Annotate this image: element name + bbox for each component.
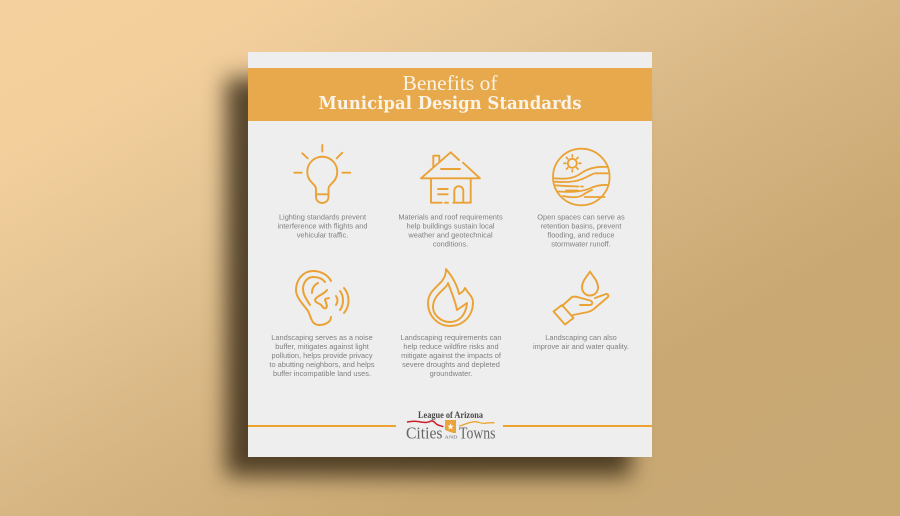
text: materials: Materials and roof requirements bbox=[398, 212, 503, 222]
text: materials: weather and geotechnical bbox=[407, 230, 493, 240]
footer rule left bbox=[248, 425, 396, 427]
icon: hand with water drop bbox=[554, 272, 608, 324]
text: open spaces: flooding, and reduce bbox=[548, 230, 614, 240]
header band bbox=[248, 68, 652, 121]
text: open spaces: stormwater runoff. bbox=[551, 240, 611, 248]
text: wildfire: severe droughts and depleted bbox=[402, 360, 500, 369]
text: wildfire: Landscaping requirements can bbox=[400, 333, 502, 342]
text: noise buffer: to abutting neighbors, and helps bbox=[269, 360, 375, 369]
text: lighting: vehicular traffic. bbox=[297, 230, 348, 240]
icon: house bbox=[421, 152, 480, 203]
logo: Arizona state star: ★ bbox=[447, 422, 455, 432]
text: lighting: Lighting standards prevent bbox=[279, 212, 366, 222]
text: air and water: improve air and water quality. bbox=[533, 342, 629, 351]
text: lighting: interference with flights and bbox=[278, 222, 367, 230]
icon: ear with sound waves bbox=[296, 271, 348, 325]
logo: wordmark bbox=[406, 424, 496, 442]
text: wildfire: mitigate against the impacts of bbox=[401, 351, 502, 360]
text: open spaces: retention basins, prevent bbox=[541, 222, 621, 230]
text: noise buffer: buffer, mitigates against light bbox=[275, 342, 369, 351]
icon: landscape in circle bbox=[553, 149, 610, 205]
text: wildfire: help reduce wildfire risks and bbox=[403, 342, 499, 351]
logo: wordmark: Cities bbox=[406, 424, 442, 442]
text: wildfire: groundwater. bbox=[430, 369, 472, 378]
footer rule right bbox=[503, 425, 652, 427]
title bbox=[318, 71, 582, 114]
text: air and water: Landscaping can also bbox=[545, 333, 617, 342]
logo: League of Arizona Cities and Towns bbox=[406, 411, 496, 442]
text: materials: help buildings sustain local bbox=[407, 222, 495, 230]
logo: orange ribbon bbox=[459, 422, 494, 426]
title: Municipal Design Standards bbox=[318, 93, 582, 114]
text: noise buffer: Landscaping serves as a noise bbox=[271, 333, 373, 342]
panel: card background bbox=[248, 52, 652, 457]
text: noise buffer: buffer incompatible land uses. bbox=[273, 369, 371, 378]
logo: wordmark: AND bbox=[444, 434, 458, 440]
icon: light bulb bbox=[294, 145, 350, 203]
title: Benefits of bbox=[402, 71, 498, 95]
text: noise buffer: pollution, helps provide privacy bbox=[271, 351, 373, 360]
logo: League of Arizona Cities and Towns: League of Arizona bbox=[418, 411, 483, 421]
descriptions bbox=[269, 212, 629, 378]
card shadow bbox=[226, 78, 631, 476]
icon: flame bbox=[428, 269, 473, 326]
text: open spaces: Open spaces can serve as bbox=[537, 212, 625, 222]
logo: wordmark: Towns bbox=[459, 424, 496, 442]
text: materials: conditions. bbox=[433, 240, 468, 248]
logo: red ribbon bbox=[407, 421, 444, 427]
